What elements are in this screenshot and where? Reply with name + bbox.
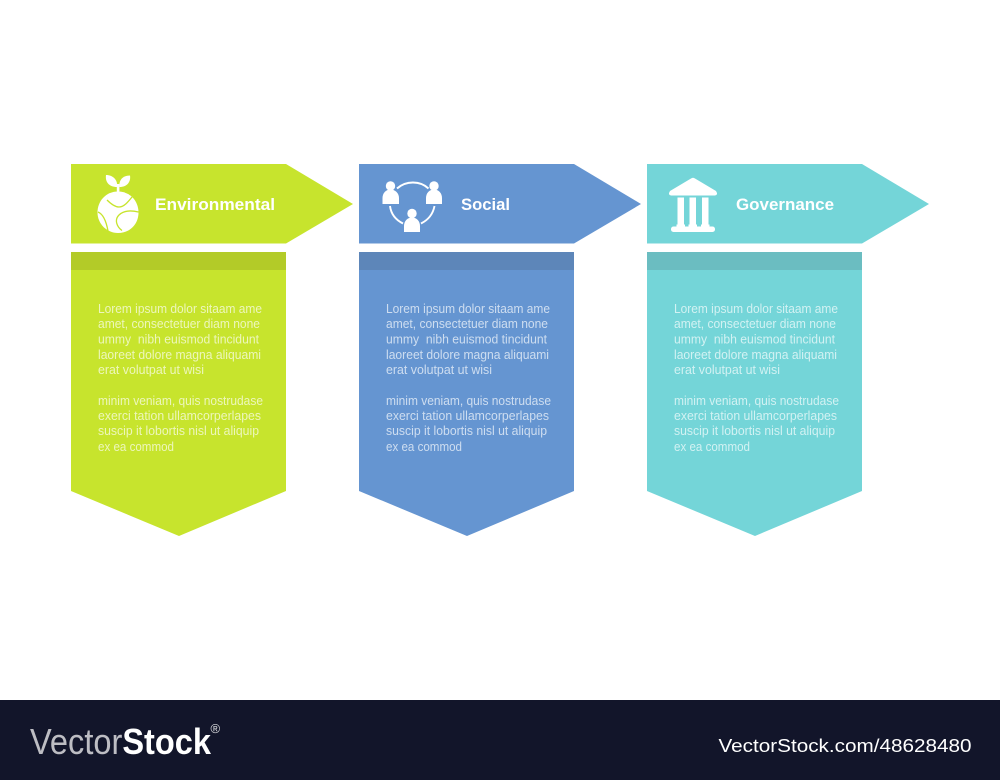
text block: Environmental: Lorem ipsum dolor sitaam ame <box>98 301 262 316</box>
text block: Governance <box>674 301 839 454</box>
footer image id: VectorStock.com/48628480 <box>718 736 972 756</box>
body panel: Governance <box>647 252 862 536</box>
heading: Governance: Governance <box>736 196 834 214</box>
footer bar <box>0 700 1000 780</box>
column: Governance <box>647 164 929 536</box>
text block: Social <box>386 301 551 454</box>
icon: classical building <box>669 178 717 232</box>
header arrow: Environmental <box>71 164 353 244</box>
text block: Social: ummy nibh euismod tincidunt <box>386 332 547 346</box>
icon: globe with sprout <box>98 175 138 233</box>
text block: Environmental: amet, consectetuer diam none <box>98 316 260 331</box>
text block: Governance: amet, consectetuer diam none <box>674 316 836 331</box>
text block: Governance: minim veniam, quis nostrudase <box>674 393 839 408</box>
text block: Environmental: suscip it lobortis nisl ut aliquip <box>98 423 259 438</box>
panel header band: Environmental <box>71 252 286 270</box>
text block: Environmental <box>98 301 263 454</box>
header arrow: Social <box>359 164 641 244</box>
panel header band: Social <box>359 252 574 270</box>
text block: Social: suscip it lobortis nisl ut aliquip <box>386 423 547 438</box>
text block: Environmental: ummy nibh euismod tincidunt <box>98 332 259 346</box>
heading: Social: Social <box>461 196 510 214</box>
text block: Governance: ummy nibh euismod tincidunt <box>674 332 835 346</box>
text block: Governance: suscip it lobortis nisl ut aliquip <box>674 423 835 438</box>
text block: Environmental: minim veniam, quis nostrudase <box>98 393 263 408</box>
text block: Governance: erat volutpat ut wisi <box>674 362 780 377</box>
text block: Environmental: exerci tation ullamcorperlapes <box>98 408 261 423</box>
text block: Social: minim veniam, quis nostrudase <box>386 393 551 408</box>
text block: Governance: exerci tation ullamcorperlapes <box>674 408 837 423</box>
text block: Social: amet, consectetuer diam none <box>386 316 548 331</box>
text block: Social: erat volutpat ut wisi <box>386 362 492 377</box>
text block: Social: Lorem ipsum dolor sitaam ame <box>386 301 550 316</box>
icon: three people in a circle <box>382 181 442 232</box>
panel header band: Governance <box>647 252 862 270</box>
text block: Governance: ex ea commod <box>674 439 750 454</box>
body panel: Environmental <box>71 252 286 536</box>
text block: Governance: laoreet dolore magna aliquami <box>674 347 837 362</box>
column: Social <box>359 164 641 536</box>
text block: Social: ex ea commod <box>386 439 462 454</box>
body panel: Social <box>359 252 574 536</box>
registered mark: ® <box>210 721 220 736</box>
text block: Environmental: ex ea commod <box>98 439 174 454</box>
text block: Environmental: erat volutpat ut wisi <box>98 362 204 377</box>
text block: Social: laoreet dolore magna aliquami <box>386 347 549 362</box>
text block: Environmental: laoreet dolore magna aliquami <box>98 347 261 362</box>
text block: Governance: Lorem ipsum dolor sitaam ame <box>674 301 838 316</box>
footer logo: VectorStock: VectorStock <box>30 721 212 762</box>
text block: Social: exerci tation ullamcorperlapes <box>386 408 549 423</box>
heading: Environmental: Environmental <box>155 196 275 214</box>
header arrow: Governance <box>647 164 929 244</box>
column: Environmental <box>71 164 353 536</box>
